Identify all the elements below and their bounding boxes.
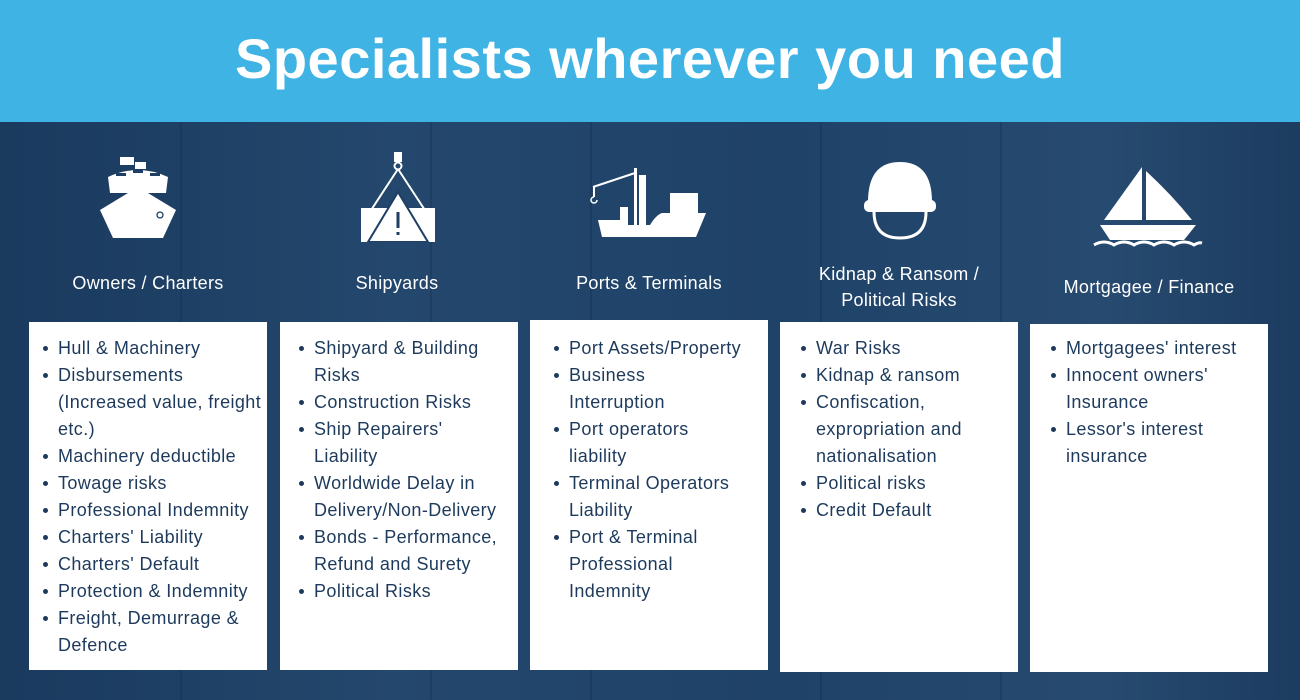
panel: kidnap: Credit Default: [816, 500, 932, 520]
panel: owners: Freight, Demurrage & Defence: [58, 608, 239, 655]
panel: owners: Hull & Machinery: [58, 338, 200, 358]
panel: owners: Professional Indemnity: [58, 500, 249, 520]
icon: helmet: [864, 162, 936, 240]
panel: kidnap: Kidnap & ransom: [816, 365, 960, 385]
panel: owners: [29, 322, 267, 670]
panel: owners: Charters' Liability: [58, 527, 203, 547]
panel: ports: Terminal Operators Liability: [569, 473, 729, 520]
panel: ports: Business Interruption: [569, 365, 665, 412]
panel: owners: Machinery deductible: [58, 446, 236, 466]
panel: shipyards: [280, 322, 518, 670]
label: kidnap: Political Risks: [841, 290, 957, 310]
panel: shipyards: Political Risks: [314, 581, 431, 601]
panel: kidnap: [780, 322, 1018, 672]
panel: owners: Towage risks: [58, 473, 167, 493]
title: [0, 0, 1300, 122]
panel: owners: Disbursements (Increased value, freight etc.): [58, 365, 261, 439]
label: mortgagee: Mortgagee / Finance: [1064, 277, 1234, 297]
panel: ports: [530, 320, 768, 670]
label: shipyards: Shipyards: [356, 273, 438, 293]
label: kidnap: [819, 264, 979, 310]
label: owners: Owners / Charters: [72, 273, 224, 293]
panel: owners: Charters' Default: [58, 554, 199, 574]
icon: crane warning: [361, 152, 435, 242]
panel: shipyards: Worldwide Delay in Delivery/Non-Delivery: [314, 473, 496, 520]
label: kidnap: Kidnap & Ransom /: [819, 264, 979, 284]
panel: ports: Port Assets/Property: [569, 338, 741, 358]
icon: port ship: [590, 168, 706, 237]
panel: mortgagee: Mortgagees' interest: [1066, 338, 1237, 358]
panel: kidnap: Confiscation, expropriation and nationalisation: [816, 392, 962, 466]
panel: mortgagee: Lessor's interest insurance: [1066, 419, 1203, 466]
panel: shipyards: Ship Repairers' Liability: [314, 419, 442, 466]
panel: owners: Protection & Indemnity: [58, 581, 248, 601]
panel: mortgagee: [1030, 324, 1268, 672]
panel: ports: Port operators liability: [569, 419, 689, 466]
panel: shipyards: Shipyard & Building Risks: [314, 338, 479, 385]
label: ports: Ports & Terminals: [576, 273, 722, 293]
icon: ship: [100, 157, 176, 238]
panel: shipyards: Construction Risks: [314, 392, 471, 412]
panel: shipyards: Bonds - Performance, Refund and Surety: [314, 527, 497, 574]
panel: mortgagee: Innocent owners' Insurance: [1066, 365, 1208, 412]
title: Specialists wherever you need: [235, 27, 1065, 90]
panel: kidnap: War Risks: [816, 338, 901, 358]
panel: kidnap: Political risks: [816, 473, 926, 493]
icon: sailboat: [1093, 167, 1202, 247]
panel: ports: Port & Terminal Professional Indemnity: [569, 527, 698, 601]
